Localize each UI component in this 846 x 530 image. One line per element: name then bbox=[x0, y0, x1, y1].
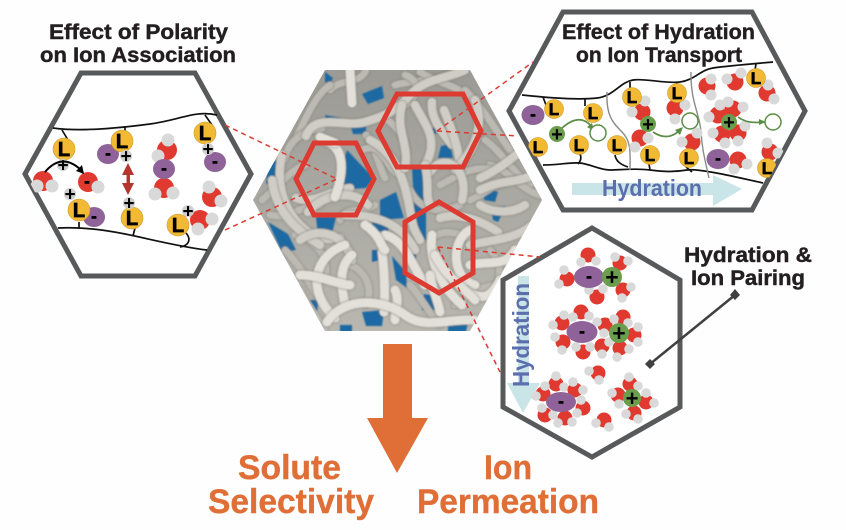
photo: mid noodles bbox=[272, 70, 540, 260]
photo: bright foreground noodles bbox=[300, 70, 515, 323]
arrow: big orange down bbox=[367, 344, 428, 473]
cations: + bbox=[612, 320, 626, 346]
label: solute selectivity: Selectivity bbox=[208, 483, 374, 521]
arrow: hydration horizontal bbox=[572, 175, 742, 206]
heading: effect of polarity: on Ion Association bbox=[40, 43, 236, 67]
panel: polarity hexagon frame bbox=[25, 73, 251, 276]
anions bbox=[546, 266, 604, 412]
callout: dashed zoom lines bbox=[225, 62, 540, 372]
label: hydration and ion pairing: Hydration & bbox=[684, 243, 812, 267]
minus signs: - bbox=[84, 171, 90, 191]
diagram: polarity ions bbox=[30, 114, 228, 250]
anions: - bbox=[586, 266, 592, 286]
ligands L bbox=[53, 122, 216, 237]
ligands L: L bbox=[116, 131, 128, 153]
minus signs: - bbox=[161, 158, 167, 178]
cations: + bbox=[123, 194, 135, 214]
label: hydration and ion pairing: Ion Pairing bbox=[691, 266, 805, 290]
cations: + bbox=[551, 124, 563, 146]
water molecules bbox=[626, 68, 784, 174]
ligands L: L bbox=[588, 104, 598, 123]
icon: red hexagon highlight bottom bbox=[405, 202, 473, 293]
anions: - bbox=[715, 148, 721, 168]
icon: red hexagon highlight top bbox=[378, 94, 481, 167]
cations bbox=[602, 264, 641, 411]
heading: effect of hydration bbox=[562, 20, 755, 67]
anions bbox=[83, 144, 226, 227]
ligands L: L bbox=[751, 69, 761, 88]
grey zone dividers bbox=[607, 72, 709, 178]
water molecules bbox=[30, 134, 228, 236]
cations: + bbox=[723, 112, 735, 134]
cations: + bbox=[605, 264, 619, 290]
anions: - bbox=[530, 104, 536, 124]
diagram: hydrated ion pairs bbox=[531, 248, 659, 432]
minus signs bbox=[84, 153, 218, 219]
ligands L: L bbox=[684, 149, 694, 168]
cations: + bbox=[202, 140, 214, 160]
cations: + bbox=[57, 156, 69, 176]
photo: background grey noodles bbox=[262, 70, 540, 330]
label: hydration horizontal: Hydration bbox=[602, 175, 702, 201]
ligands L: L bbox=[574, 136, 584, 155]
ligands L: L bbox=[627, 88, 637, 107]
cations: + bbox=[64, 184, 76, 206]
arrow: double headed red bbox=[122, 163, 134, 195]
cations: + bbox=[642, 114, 654, 136]
ligands L: L bbox=[549, 100, 559, 119]
ligands L: L bbox=[58, 139, 70, 161]
panel: membrane photo hexagon bbox=[250, 68, 545, 333]
ligands L: L bbox=[126, 208, 138, 230]
ligands L bbox=[528, 68, 776, 178]
cations: + bbox=[182, 202, 194, 222]
label: ion permeation bbox=[417, 449, 599, 521]
arrow: ion hop bbox=[45, 161, 84, 174]
cations: + bbox=[626, 386, 638, 411]
photo: blue substrate patches bbox=[266, 72, 506, 332]
transport arrows bbox=[562, 117, 766, 137]
panel: hydration transport hexagon frame bbox=[509, 12, 805, 210]
minus signs: - bbox=[91, 206, 97, 226]
label: solute selectivity bbox=[208, 449, 374, 521]
ligands L: L bbox=[645, 146, 655, 165]
heading: effect of hydration: Effect of Hydration bbox=[562, 20, 755, 44]
cations: + bbox=[120, 146, 132, 168]
ligands L: L bbox=[762, 159, 772, 178]
ligands L: L bbox=[73, 200, 85, 222]
ligands L: L bbox=[199, 123, 211, 145]
minus signs: - bbox=[105, 143, 111, 163]
vacancy circles bbox=[590, 113, 781, 141]
polymer chains bbox=[53, 114, 217, 250]
ligands L: L bbox=[533, 138, 543, 157]
heading: effect of polarity: Effect of Polarity bbox=[49, 20, 228, 44]
heading: effect of polarity bbox=[40, 20, 236, 67]
label: ion permeation: Permeation bbox=[417, 483, 599, 521]
icon: red hexagon highlight left bbox=[296, 143, 374, 215]
ligands L: L bbox=[172, 215, 184, 237]
diagram: hydration transport ions bbox=[522, 62, 784, 183]
heading: effect of hydration: on Ion Transport bbox=[576, 43, 742, 67]
arrow: pointer line to ion pairs bbox=[645, 289, 740, 369]
panel: ion pairing hexagon frame bbox=[503, 228, 680, 457]
minus signs: - bbox=[212, 151, 218, 171]
label: solute selectivity: Solute bbox=[238, 449, 341, 487]
label: hydration vertical: Hydration bbox=[508, 283, 534, 387]
cations bbox=[549, 114, 737, 142]
anions bbox=[522, 104, 730, 169]
ligands L: L bbox=[612, 136, 622, 155]
polymer chains bbox=[522, 62, 773, 183]
ligands L: L bbox=[672, 84, 682, 103]
arrow: hydration vertical bbox=[507, 276, 540, 413]
anions: - bbox=[558, 391, 564, 411]
label: hydration and ion pairing bbox=[684, 243, 812, 290]
water molecules bbox=[531, 248, 659, 432]
anions: - bbox=[579, 321, 585, 341]
cations bbox=[57, 143, 214, 217]
label: ion permeation: Ion bbox=[484, 449, 532, 487]
